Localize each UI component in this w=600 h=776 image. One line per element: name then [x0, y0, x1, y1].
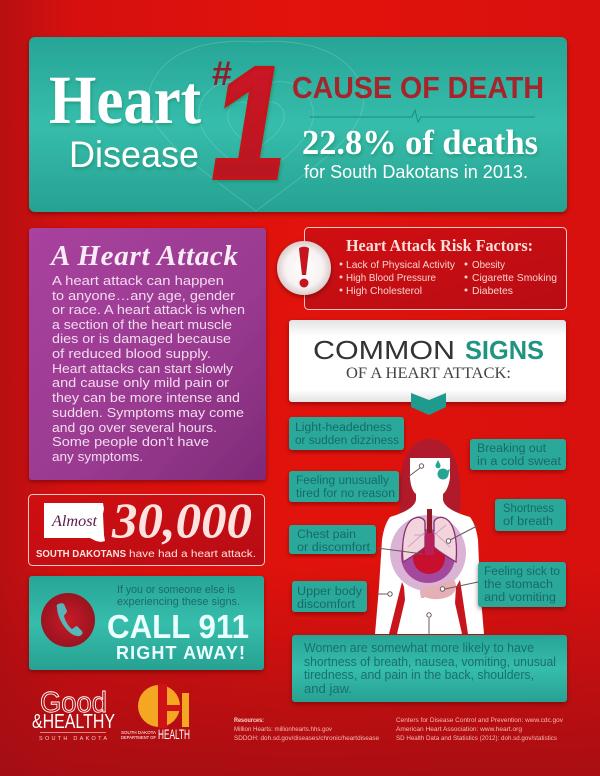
callout: shortness of breath: of breath	[503, 516, 553, 528]
subheading: OF A HEART ATTACK:	[346, 365, 511, 382]
callout: upper body	[292, 581, 367, 612]
panel: women symptoms	[292, 635, 567, 702]
list: right column: Diabetes	[472, 285, 513, 297]
panel: almost 30,000	[28, 492, 264, 566]
resources: left column	[234, 717, 379, 742]
heartbeat line	[310, 110, 535, 122]
icon: exclamation	[277, 241, 331, 295]
body text: they can be more intense and	[52, 390, 240, 405]
heading: right away: RIGHT AWAY!	[116, 643, 245, 663]
list: left column: High Cholesterol	[346, 285, 422, 297]
heading: call 911: CALL 911	[107, 608, 249, 645]
hair	[399, 439, 460, 512]
panel: women symptoms: Women are somewhat more likely to have	[304, 641, 534, 655]
caption: for South Dakotans: for South Dakotans in 2013.	[304, 162, 528, 182]
body text: and go over several hours.	[52, 420, 217, 435]
callout: unusually tired	[289, 471, 399, 502]
panel: common signs heading	[289, 320, 566, 415]
resources: right column	[396, 717, 564, 742]
resources: right column: SD Health Data and Statistics (2012): doh.sd.gov/statistics	[396, 735, 558, 742]
callout: chest pain	[289, 525, 376, 554]
icon: South Dakota map	[44, 503, 105, 542]
panel: women symptoms: shortness of breath, nausea, vomiting, unusual	[304, 655, 556, 669]
list: right column: Obesity	[472, 259, 506, 271]
resources: left column: Resources:	[234, 717, 264, 724]
list: left column: Lack of Physical Activity	[346, 259, 456, 271]
arm gaps	[389, 580, 468, 634]
body text: or race. A heart attack is when	[52, 302, 245, 317]
caption: have had a heart attack.	[129, 549, 256, 560]
body text: any symptoms.	[52, 449, 143, 464]
callout: chest pain: Chest pain	[297, 529, 356, 541]
icon: phone	[41, 593, 95, 647]
text: if you or someone: If you or someone else is	[117, 584, 235, 596]
caption: SOUTH DAKOTANS	[36, 549, 126, 560]
heading: common: COMMON	[313, 335, 455, 365]
list: left column: High Blood Pressure	[346, 272, 436, 284]
panel: risk factors	[277, 228, 566, 310]
connector lines	[377, 464, 478, 635]
heading: a heart attack: A Heart Attack	[49, 240, 238, 272]
body text: Heart attacks can start slowly	[52, 361, 234, 376]
icon: sweat drop and hand	[435, 460, 450, 480]
heading: signs: SIGNS	[465, 335, 544, 365]
callout: feeling sick: and vomiting	[484, 592, 556, 604]
callout: cold sweat: Breaking out	[477, 443, 547, 455]
body text: and cause only mild pain or	[52, 375, 230, 390]
body text: Some people don’t have	[52, 434, 209, 449]
callout: feeling sick: the stomach	[484, 579, 553, 591]
callout: light-headedness: Light-headedness	[295, 422, 392, 434]
logo: good and healthy: Good	[40, 687, 107, 719]
panel: heart disease headline	[29, 33, 567, 212]
title: Disease: Disease	[69, 134, 199, 175]
title: Heart: Heart	[49, 62, 201, 138]
panel: a heart attack	[29, 228, 266, 480]
logo: department of health: SOUTH DAKOTA	[121, 730, 157, 736]
panel: call 911	[29, 576, 264, 670]
logo: department of health: DEPARTMENT OF	[121, 735, 156, 741]
callout: light-headedness	[289, 417, 404, 450]
statistic: 22.8% of deaths: 22.8% of deaths	[302, 123, 538, 162]
organs	[390, 509, 466, 599]
logo: department of health	[121, 684, 190, 742]
callout: upper body: discomfort	[297, 599, 356, 611]
hash sign: #	[212, 55, 232, 93]
heading: cause of death: CAUSE OF DEATH	[292, 70, 544, 105]
big number 1: 1	[212, 33, 286, 212]
callout: cold sweat	[470, 439, 566, 470]
list: left column	[340, 259, 456, 297]
list: right column: Cigarette Smoking	[472, 272, 557, 284]
icon: chevron	[411, 393, 446, 415]
label: almost: Almost	[51, 513, 98, 530]
panel: women symptoms: and jaw.	[304, 682, 352, 696]
callout: unusually tired: Feeling unusually	[296, 475, 389, 487]
body text: A heart attack can happen	[52, 273, 224, 288]
resources: left column: Million Hearts: millionhearts.hhs.gov	[234, 726, 333, 733]
logo: good and healthy	[32, 687, 115, 742]
callout: shortness of breath: Shortness	[503, 503, 554, 515]
logo: department of health: HEALTH	[158, 727, 190, 742]
body text: to anyone…any age, gender	[52, 288, 236, 303]
decorative heart outlines	[148, 41, 364, 211]
body text: a section of the heart muscle	[52, 317, 232, 332]
list: right column	[464, 259, 557, 297]
figure: woman body	[375, 439, 484, 635]
callout: shortness of breath	[495, 499, 566, 531]
body text: sudden. Symptoms may come	[52, 405, 244, 420]
body text: dies or is damaged because	[52, 331, 231, 346]
heading: risk factors: Heart Attack Risk Factors:	[346, 236, 533, 255]
panel: call 911: experiencing these signs.	[117, 596, 240, 608]
body text	[52, 273, 245, 464]
logo: good and healthy: SOUTH DAKOTA	[39, 736, 107, 742]
resources: left column: SDDOH: doh.sd.gov/diseases/chronic/heartdisease	[234, 735, 379, 742]
callout: feeling sick: Feeling sick to	[484, 566, 560, 578]
callout: unusually tired: tired for no reason	[296, 488, 395, 500]
callout: cold sweat: in a cold sweat	[477, 456, 562, 468]
number: 30,000: 30,000	[111, 492, 252, 548]
resources: right column: Centers for Disease Control and Prevention: www.cdc.gov	[396, 717, 564, 724]
logo: good and healthy: &HEALTHY	[32, 711, 115, 733]
callout: light-headedness: or sudden dizziness	[295, 435, 399, 447]
body text: of reduced blood supply.	[52, 346, 211, 361]
callout: chest pain: or discomfort	[297, 542, 371, 554]
resources: right column: American Heart Association: www.heart.org	[396, 726, 522, 733]
panel: women symptoms: tiredness, and pain in the back, shoulders,	[304, 668, 534, 682]
callout: feeling sick	[478, 562, 566, 607]
callout: upper body: Upper body	[297, 586, 362, 598]
body silhouette	[375, 458, 484, 634]
